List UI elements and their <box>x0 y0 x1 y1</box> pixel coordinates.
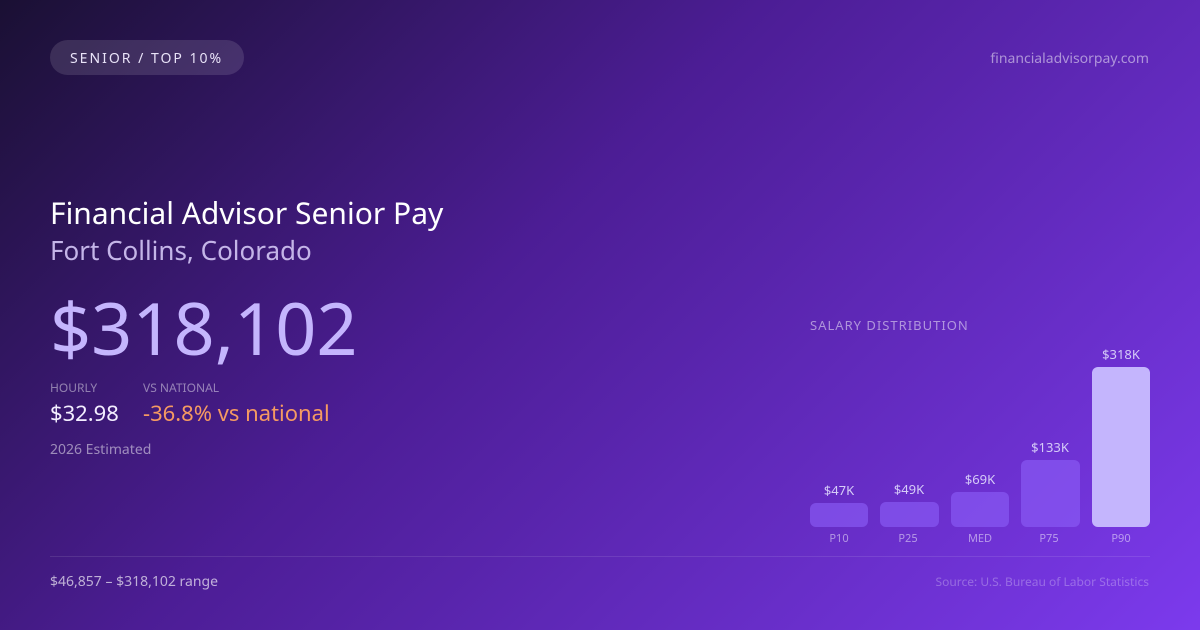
source: Source: U.S. Bureau of Labor Statistics <box>936 573 1149 590</box>
headline salary: $318,102 <box>50 279 358 377</box>
estimate note: 2026 Estimated <box>50 440 151 459</box>
value median: $69K <box>965 470 995 488</box>
badge: senior / top 10%: SENIOR / TOP 10% <box>70 49 223 68</box>
label median: MED <box>968 531 992 546</box>
title: Financial Advisor Senior Pay <box>50 192 443 233</box>
vs national value: -36.8% vs national <box>143 398 330 428</box>
label: hourly: HOURLY <box>50 379 97 396</box>
subtitle: location: Fort Collins, Colorado <box>50 232 312 268</box>
bar P75 <box>1021 460 1080 527</box>
label P75: P75 <box>1039 531 1059 546</box>
value P25: $49K <box>894 480 924 498</box>
bar P90 <box>1092 367 1150 527</box>
label P25: P25 <box>898 531 918 546</box>
label P10: P10 <box>829 531 849 546</box>
bar P10 <box>810 503 868 527</box>
hourly value: $32.98 <box>50 398 119 428</box>
chart heading: SALARY DISTRIBUTION <box>810 316 969 334</box>
salary range: $46,857 – $318,102 range <box>50 572 218 591</box>
bar P25 <box>880 502 939 527</box>
bar median <box>951 492 1009 527</box>
label: vs national: VS NATIONAL <box>143 379 219 396</box>
label P90: P90 <box>1111 531 1131 546</box>
value P75: $133K <box>1031 438 1069 456</box>
site url: financialadvisorpay.com <box>990 49 1149 68</box>
value P90: $318K <box>1102 345 1140 363</box>
value P10: $47K <box>824 481 854 499</box>
badge: senior / top 10% <box>50 40 244 75</box>
chart: salary distribution <box>810 316 1150 546</box>
